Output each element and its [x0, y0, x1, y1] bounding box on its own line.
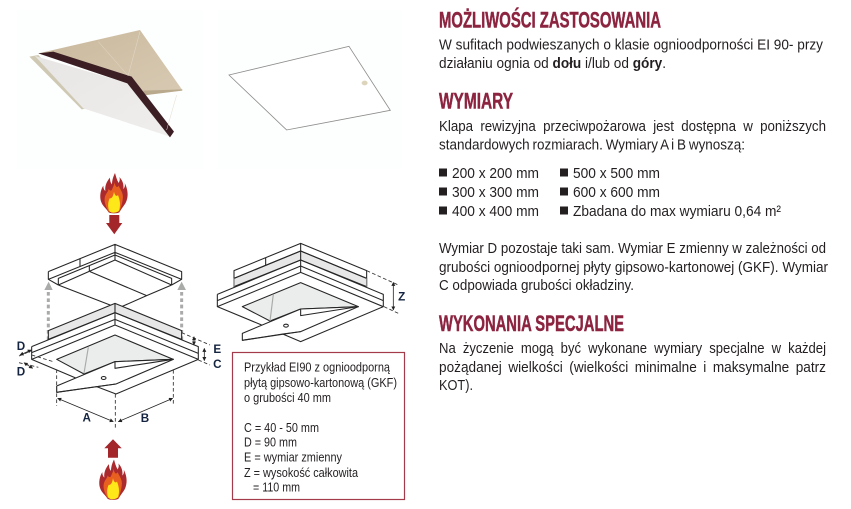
callout: EI90 example [232, 352, 404, 500]
callout: EI90 example: Przykład EI90 z ognioodporną [244, 361, 390, 375]
list: standard sizes: 200 x 200 mm [452, 165, 539, 182]
dimension labels: D [17, 340, 25, 353]
text: dimension notes [439, 240, 828, 294]
callout: EI90 example: płytą gipsowo-kartonową (GKF) [244, 376, 397, 390]
text: applications: działaniu ognia od dołu i/lub od góry. [439, 55, 666, 72]
photo: open access panel [17, 10, 203, 169]
arrow: fire from above [106, 215, 122, 234]
dimension labels [17, 340, 222, 425]
dimension labels: E [213, 343, 221, 356]
callout: EI90 example: E = wymiar zmienny [244, 451, 343, 465]
heading: wykonania specjalne: WYKONANIA SPECJALNE [439, 311, 624, 336]
dimension labels: B [141, 412, 149, 425]
dimension labels: A [82, 411, 91, 424]
diagram: assembled ceiling with Z dimension [217, 243, 405, 342]
list: standard sizes [439, 165, 781, 220]
text: dimension notes: C odpowiada grubości okładziny. [439, 277, 634, 294]
heading: wymiary: WYMIARY [439, 88, 513, 114]
photo: closed access panel [218, 10, 402, 169]
text: special versions [439, 340, 826, 394]
dimension labels: D [17, 366, 25, 379]
dimension labels: C [213, 358, 222, 371]
callout: EI90 example: Z = wysokość całkowita [244, 466, 358, 480]
list: standard sizes: 500 x 500 mm [573, 165, 660, 182]
dimension lines [19, 333, 210, 430]
diagram: lower ceiling with opened door [17, 303, 222, 430]
diagram: assembled ceiling with Z dimension: Z [398, 290, 405, 303]
icon: flame bottom [99, 460, 127, 500]
text: applications: W sufitach podwieszanych o klasie ognioodporności EI 90- przy [439, 36, 823, 54]
text: dimensions intro: standardowych rozmiarach. Wymiary A i B wynoszą: [439, 136, 745, 154]
heading: możliwości zastosowania: MOŻLIWOŚCI ZASTOSOWANIA [439, 8, 661, 32]
arrows: gray dashed lift arrows [44, 282, 186, 340]
list: standard sizes: Zbadana do max wymiaru 0,64 m² [573, 203, 781, 220]
callout: EI90 example: D = 90 mm [244, 436, 297, 450]
text: dimensions intro [439, 118, 826, 154]
list: standard sizes: 600 x 600 mm [573, 184, 660, 201]
callout: EI90 example: o grubości 40 mm [244, 391, 331, 405]
list: standard sizes: 300 x 300 mm [452, 184, 539, 201]
icon: flame top [100, 173, 128, 213]
diagram: upper ceiling layer [48, 244, 182, 307]
callout: EI90 example: C = 40 - 50 mm [244, 421, 319, 435]
callout: EI90 example: = 110 mm [253, 481, 300, 495]
text: applications [439, 36, 823, 72]
arrow: fire from below [104, 439, 122, 458]
text: special versions: KOT). [439, 377, 473, 394]
list: standard sizes: 400 x 400 mm [452, 203, 539, 220]
